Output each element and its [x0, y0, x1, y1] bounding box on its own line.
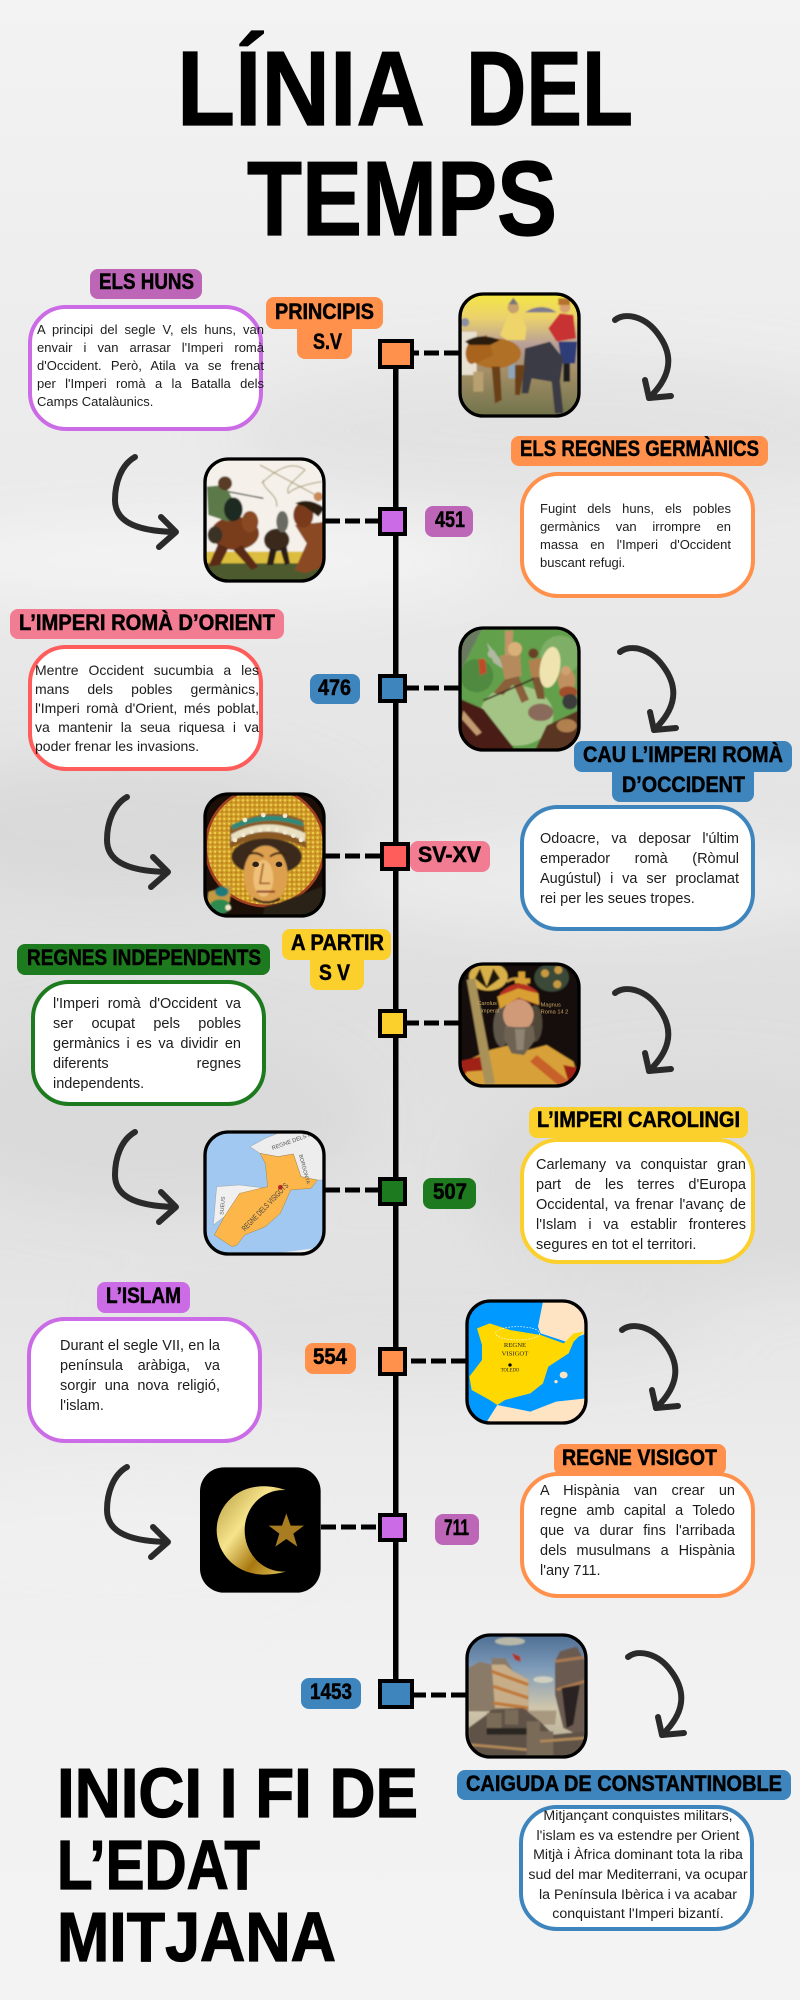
date tag: 1453: [301, 1678, 361, 1709]
image: map of visigothic iberia: VISIGOT: [502, 1350, 528, 1357]
heading: l'islam: L’ISLAM: [106, 1283, 181, 1308]
text box: regne visigot: que va durar fins l'arribada: [540, 1523, 735, 1539]
date tag: 1453: 1453: [310, 1679, 352, 1704]
text box: l'imperi romà d'orient: l'Imperi romà d'Orient, més poblat,: [35, 700, 259, 716]
text box: regnes independents: diferents regnes: [53, 1056, 241, 1072]
text box: regnes independents: germànics i es va dividir en: [53, 1036, 241, 1052]
text box: caiguda de constantinoble: Mitjà i Àfrica dominant tota la riba: [533, 1847, 743, 1863]
panel: regne visigot: [520, 1444, 755, 1598]
image: map of visigothic iberia: [464, 1297, 590, 1427]
text box: caiguda de constantinoble: l'islam es va estendre per Orient: [536, 1828, 740, 1844]
date tag: 451: 451: [435, 507, 465, 532]
arrow 9: right curve: [628, 1653, 684, 1735]
text box: els regnes germànics: Fugint dels huns, els pobles: [540, 501, 731, 516]
arrow 6: left curve: [115, 1132, 176, 1222]
panel: els regnes germànics: [511, 436, 768, 598]
title: línia del temps: DEL: [466, 30, 633, 148]
text box: els huns: per l'Imperi romà a la Batalla dels: [37, 376, 264, 391]
panel: regnes independents: [17, 944, 270, 1106]
marker: a partir s v: [380, 1011, 405, 1036]
text box: els huns: [28, 305, 263, 431]
text box: l'islam: península aràbiga, va: [60, 1358, 220, 1374]
text box: l'imperi carolingi: [520, 1138, 755, 1264]
date tag: 554: [305, 1343, 356, 1374]
marker: 451: [380, 509, 405, 534]
date tag: 507: 507: [433, 1179, 467, 1204]
text box: regne visigot: A Hispània van crear un: [540, 1483, 735, 1499]
text box: cau l'imperi romà d'occident: rei per les seues tropes.: [540, 891, 695, 907]
heading: els regnes germànics: ELS REGNES GERMÀNICS: [520, 436, 759, 461]
marker: 507: [380, 1179, 405, 1204]
text box: els huns: Camps Catalàunics.: [37, 394, 153, 409]
text box: l'imperi romà d'orient: Mentre Occident sucumbia a les: [35, 662, 259, 678]
image: map of visigoth kingdom: BORGONYA: [297, 1154, 311, 1185]
text box: caiguda de constantinoble: Mitjançant conquistes militars,: [543, 1808, 733, 1824]
image: battle riders: [202, 455, 328, 585]
heading: l'imperi romà d'orient: L’IMPERI ROMÀ D’ORIENT: [19, 610, 276, 635]
title: línia del temps: LÍNIA: [177, 30, 425, 148]
image: map of visigoth kingdom: [202, 1125, 331, 1258]
heading: regnes independents: REGNES INDEPENDENTS: [27, 945, 261, 970]
text box: l'imperi romà d'orient: mans dels pobles germànics,: [35, 680, 259, 696]
arrow 2: left curve: [115, 457, 176, 547]
panel: l'islam: [27, 1282, 262, 1443]
text box: regnes independents: independents.: [53, 1076, 144, 1092]
date tag: principis s.v: [266, 297, 383, 359]
marker: 711: [380, 1515, 405, 1540]
text box: l'imperi carolingi: part de les terres d'Europa: [536, 1177, 746, 1193]
text box: l'islam: Durant el segle VII, en la: [60, 1338, 220, 1354]
title: inici i fi de l'edat mitjana: L’EDAT: [57, 1826, 260, 1904]
text box: caiguda de constantinoble: sud del mar Mediterrani, va ocupar: [528, 1867, 748, 1883]
text box: regne visigot: regne amb capital a Toledo: [540, 1503, 735, 1519]
text box: cau l'imperi romà d'occident: emperador romà (Ròmul: [540, 851, 739, 867]
date tag: 476: [310, 674, 360, 704]
image: crescent and star: [200, 1467, 321, 1593]
text box: els regnes germànics: buscant refugi.: [540, 555, 625, 570]
text box: caiguda de constantinoble: la Península Ibèrica i va acabar: [539, 1887, 737, 1903]
text box: els regnes germànics: [520, 472, 755, 598]
panel: l'imperi carolingi: [520, 1107, 755, 1264]
text box: l'imperi romà d'orient: poder frenar les invasions.: [35, 738, 199, 754]
text box: l'imperi carolingi: segures en tot el territori.: [536, 1237, 696, 1253]
text box: regnes independents: ser ocupat pels pobles: [53, 1016, 241, 1032]
date tag: 507: [423, 1178, 476, 1209]
date tag: 554: 554: [313, 1344, 348, 1369]
text box: cau l'imperi romà d'occident: [520, 805, 755, 931]
title: línia del temps: [177, 30, 633, 258]
connector dashes: [321, 353, 466, 1695]
image: map of visigothic iberia: TOLEDO: [501, 1368, 520, 1373]
date tag: a partir s v: [282, 929, 391, 990]
text box: regnes independents: l'Imperi romà d'Occident va: [53, 996, 241, 1012]
marker: 554: [380, 1349, 405, 1374]
title: inici i fi de l'edat mitjana: [57, 1754, 418, 1976]
arrow 7: right curve: [622, 1326, 678, 1408]
title: línia del temps: TEMPS: [247, 140, 557, 258]
image: barbarians in forest: [457, 624, 583, 754]
image: map of visigoth kingdom: REGNE DELS VISIGOTS: [240, 1181, 290, 1233]
image: map of visigothic iberia: REGNE: [504, 1342, 526, 1349]
title: inici i fi de l'edat mitjana: INICI I FI DE: [57, 1754, 418, 1832]
heading: cau l'imperi romà d'occident: D’OCCIDENT: [622, 772, 746, 797]
text box: els regnes germànics: germànics van irrompre en: [540, 519, 731, 534]
panel: els huns: [28, 269, 264, 431]
text box: els huns: A principi del segle V, els huns, van: [37, 322, 264, 337]
image: map of visigoth kingdom: SUEUS: [219, 1196, 227, 1215]
heading: cau l'imperi romà d'occident: CAU L’IMPERI ROMÀ: [583, 742, 783, 767]
date tag: 451: [425, 506, 473, 537]
text box: cau l'imperi romà d'occident: Augústul) i va ser proclamat: [540, 871, 739, 887]
text box: caiguda de constantinoble: [519, 1805, 754, 1931]
text box: regne visigot: dels musulmans a Hispània: [540, 1543, 735, 1559]
image: mosaic of justinian: [202, 787, 328, 920]
image: charlemagne portrait: Magnus: [541, 1003, 561, 1009]
date tag: 711: 711: [444, 1515, 469, 1540]
image: charlemagne portrait: [457, 960, 583, 1090]
image: charlemagne portrait: imperat: [481, 1008, 500, 1014]
timeline: [321, 341, 466, 1707]
date tag: 476: 476: [318, 675, 351, 700]
text box: cau l'imperi romà d'occident: Odoacre, va deposar l'últim: [540, 831, 739, 847]
date tag: 711: [435, 1514, 479, 1545]
marker: 1453: [380, 1681, 412, 1707]
text box: l'islam: [27, 1317, 262, 1443]
text box: els huns: d'Occident. Però, Atila va se frenat: [37, 358, 264, 373]
marker: sv-xv: [382, 844, 408, 869]
text box: l'imperi carolingi: l'Islam i va establir fronteres: [536, 1217, 746, 1233]
panel: caiguda de constantinoble: [457, 1770, 791, 1931]
image: huns on horseback: [457, 290, 583, 420]
date tag: principis s.v: PRINCIPIS: [275, 299, 374, 324]
text box: caiguda de constantinoble: conquistant l'Imperi bizantí.: [552, 1906, 724, 1922]
text box: l'islam: l'islam.: [60, 1398, 104, 1414]
image: charlemagne portrait: Carolus: [477, 1001, 497, 1007]
text box: regne visigot: [520, 1472, 755, 1598]
marker: 476: [380, 676, 405, 701]
arrow 5: right curve: [615, 989, 671, 1071]
panel: l'imperi romà d'orient: [10, 609, 284, 771]
date tag: principis s.v: S.V: [313, 329, 342, 354]
text box: l'imperi carolingi: Occidental, va frenar l'avanç de: [536, 1197, 746, 1213]
image: charlemagne portrait: Roma 14 2: [541, 1010, 568, 1016]
heading: cau l'imperi romà d'occident: [574, 741, 792, 802]
arrow 8: left curve: [107, 1467, 168, 1557]
heading: regne visigot: REGNE VISIGOT: [562, 1445, 717, 1470]
text box: regne visigot: l'any 711.: [540, 1563, 601, 1579]
arrow 1: right curve: [615, 316, 671, 398]
marker: principis s.v: [380, 341, 412, 367]
text box: l'islam: sorgir una nova religió,: [60, 1378, 220, 1394]
text box: els regnes germànics: massa en l'Imperi d'Occident: [540, 537, 731, 552]
heading: l'imperi carolingi: L’IMPERI CAROLINGI: [537, 1107, 740, 1132]
text box: els huns: envair i van arrasar l'Imperi romà: [37, 340, 264, 355]
arrow 3: right curve: [620, 648, 676, 730]
text box: regnes independents: [31, 980, 266, 1106]
date tag: sv-xv: SV-XV: [418, 842, 481, 867]
arrow 4: left curve: [107, 797, 168, 887]
title: inici i fi de l'edat mitjana: MITJANA: [57, 1898, 336, 1976]
text box: l'imperi carolingi: Carlemany va conquistar gran: [536, 1157, 746, 1173]
timeline spine: [393, 360, 398, 1685]
date tag: a partir s v: A PARTIR: [291, 930, 384, 955]
image: map of visigoth kingdom: REGNE DELS FRANCS: [271, 1125, 331, 1152]
image: walls of constantinople: [465, 1633, 588, 1759]
heading: els huns: ELS HUNS: [99, 269, 194, 294]
date tag: a partir s v: S V: [319, 960, 350, 985]
date tag: sv-xv: [410, 841, 490, 872]
text box: l'imperi romà d'orient: [28, 645, 263, 771]
panel: cau l'imperi romà d'occident: [520, 741, 792, 931]
text box: l'imperi romà d'orient: va mantenir la seua riquesa i va: [35, 718, 259, 734]
